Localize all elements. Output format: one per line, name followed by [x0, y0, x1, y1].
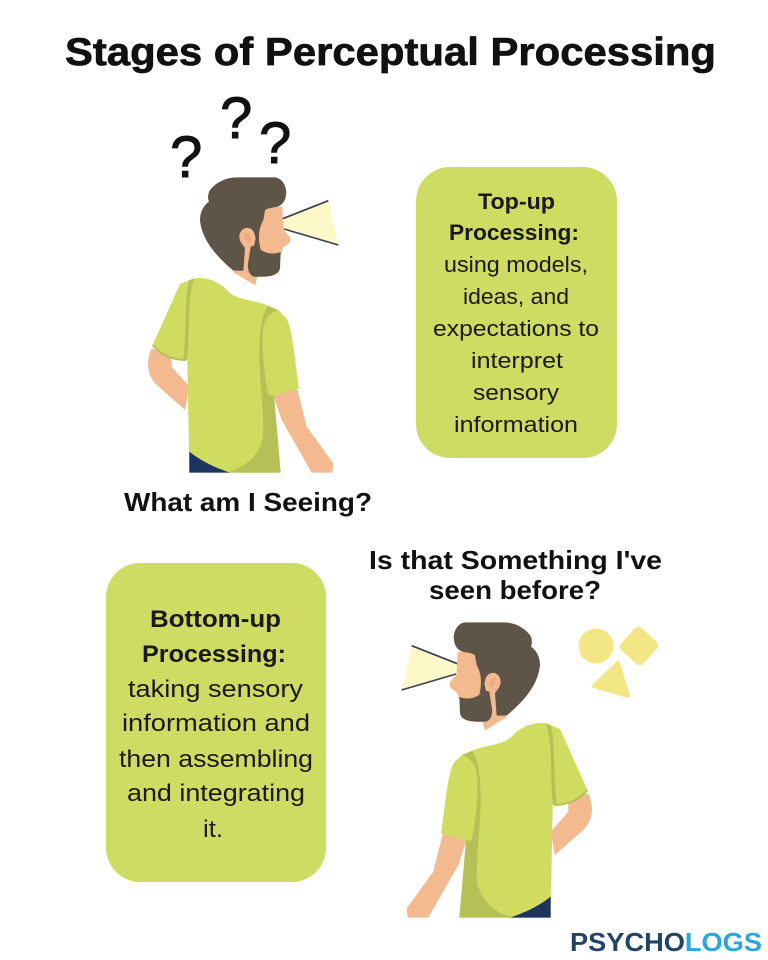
heading: bottom-up processing: Processing:: [142, 641, 286, 668]
caption: is that something I've seen before: Is that Something I've: [369, 545, 662, 575]
title: Stages of Perceptual Processing: [65, 31, 716, 74]
text block: top-up description: information: [454, 412, 578, 437]
panel: top-up processing: [416, 167, 617, 458]
text block: bottom-up description: information and: [122, 710, 310, 737]
icon: question marks: [170, 86, 291, 190]
text block: top-up description: interpret: [471, 348, 563, 373]
icon: question marks: ?: [220, 86, 252, 151]
text block: bottom-up description: [119, 676, 313, 843]
icon: vision cone: [402, 646, 457, 690]
logo: psychologs: PSYCHOLOGS: [570, 927, 762, 957]
caption: is that something I've seen before: [369, 545, 662, 605]
icon: question marks: ?: [170, 125, 202, 190]
text block: top-up description: expectations to: [433, 316, 599, 341]
text block: top-up description: ideas, and: [463, 284, 569, 309]
heading: bottom-up processing: [142, 606, 286, 668]
figure: man looking right: [148, 177, 338, 473]
text block: bottom-up description: then assembling: [119, 746, 313, 773]
heading: bottom-up processing: Bottom-up: [150, 606, 281, 633]
text block: bottom-up description: and integrating: [127, 780, 305, 807]
caption: what am I seeing: What am I Seeing?: [124, 487, 372, 517]
text block: top-up description: [433, 252, 599, 437]
sideburn: [477, 665, 486, 694]
icon: question marks: ?: [259, 111, 291, 176]
shirt: [153, 278, 299, 473]
heading: top-up processing: Processing:: [449, 220, 579, 245]
text block: top-up description: using models,: [444, 252, 588, 277]
shirt: [441, 723, 587, 918]
icon: geometric shapes: [578, 625, 660, 696]
icon: ear: [239, 228, 255, 250]
sideburn: [254, 220, 263, 249]
caption: is that something I've seen before: seen before?: [429, 575, 601, 605]
heading: top-up processing: [449, 189, 579, 245]
figure: man looking left: [402, 622, 592, 918]
text block: bottom-up description: taking sensory: [128, 676, 303, 703]
icon: ear: [485, 673, 501, 695]
heading: top-up processing: Top-up: [478, 189, 555, 214]
text block: bottom-up description: it.: [203, 816, 223, 843]
panel: bottom-up processing: [106, 563, 326, 882]
text block: top-up description: sensory: [473, 380, 559, 405]
icon: vision cone: [283, 201, 338, 245]
